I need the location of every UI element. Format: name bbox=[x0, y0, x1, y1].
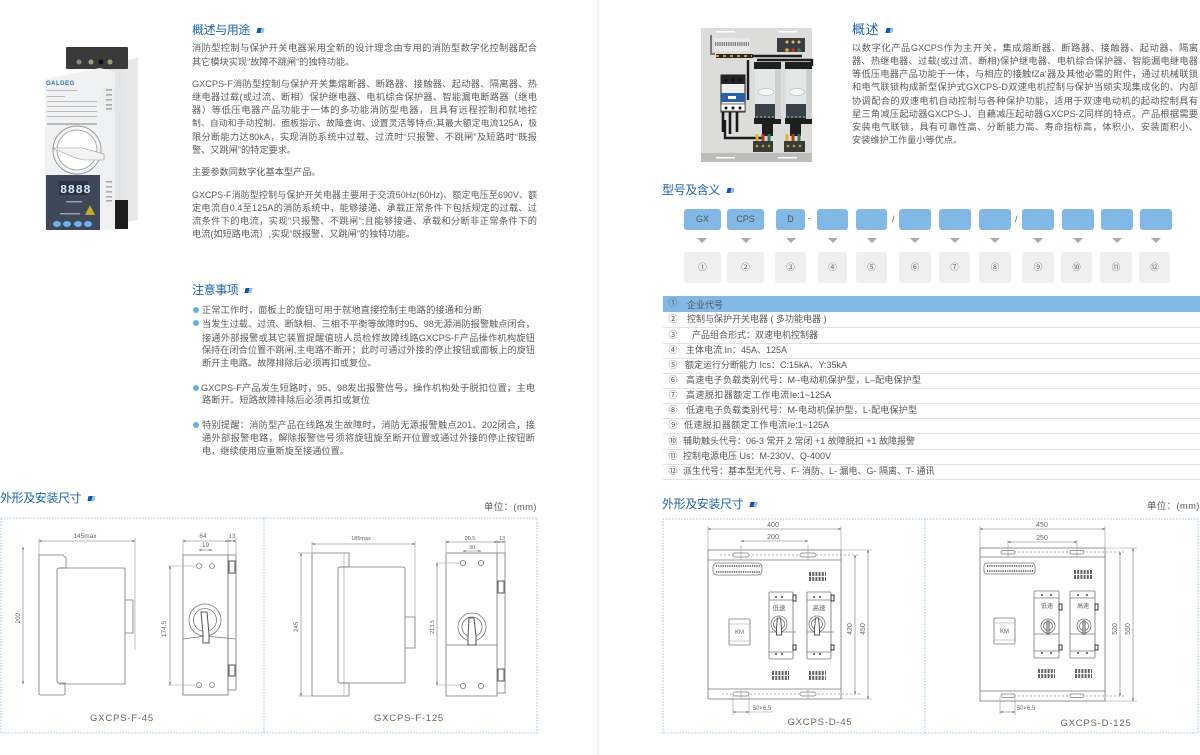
model code diagram: / bbox=[892, 214, 895, 224]
table: code meaning: ② bbox=[668, 314, 678, 324]
text block: overview: 器）等低压电器产品功能于一体的多功能消防型电器，且具有远程控制和就地控 bbox=[192, 105, 537, 115]
text block: precautions: 保持在闭合位置不跳闸,主电路不断开；此时可通过外接的停止按钮或面板上的旋钮 bbox=[202, 345, 535, 355]
front view: 30 bbox=[469, 545, 475, 551]
terminal blocks bbox=[772, 574, 826, 678]
model code diagram: ⑩ bbox=[1072, 262, 1081, 272]
text block: overview: GXCPS-F消防型控制与保护开关集熔断器、断路器、接触器、起动器、隔离器、热 bbox=[192, 79, 537, 89]
text block: precautions: 通外部报警电路，解除报警信号须将旋钮旋至断开位置或通过外接的停止按钮断 bbox=[202, 433, 535, 443]
dimensions: 200 bbox=[767, 534, 779, 541]
model label: GXCPS-F-45 bbox=[90, 713, 154, 724]
model code diagram: ⑫ bbox=[1150, 262, 1159, 272]
code boxes bbox=[684, 209, 721, 230]
side view bbox=[294, 536, 415, 696]
table: code meaning: ⑥ bbox=[668, 375, 678, 385]
model code diagram: / bbox=[1015, 214, 1018, 224]
low speed breaker bbox=[769, 592, 796, 659]
table: code meaning: ① bbox=[668, 298, 678, 308]
low speed breaker: 低速 bbox=[1041, 602, 1053, 610]
front view: 13 bbox=[228, 533, 236, 540]
text block: overview: 制、自动和手动控制、面板指示、故障查询、设置灵活等特点;其最大额定电流125A，极 bbox=[192, 118, 537, 128]
front view: 64 bbox=[199, 533, 207, 540]
photo: GXCPS-D panel bbox=[701, 28, 812, 162]
dimensions: 400 bbox=[767, 522, 779, 529]
table: code meaning: 产品组合形式：双速电机控制器 bbox=[692, 330, 818, 340]
text block: overview right: 安装维护工作量小等优点。 bbox=[852, 135, 962, 145]
dimensions: 50×6.5 bbox=[1017, 706, 1036, 712]
text block: precautions: 正常工作时，面板上的旋钮可用于就地直接控制主电路的接通和分断 bbox=[202, 305, 482, 315]
table: code meaning: 派生代号：基本型无代号、F- 消防、L- 漏电、G- 隔离、T- 通讯 bbox=[683, 466, 934, 476]
high speed breaker: 高速 bbox=[812, 603, 826, 612]
model code diagram: ① bbox=[698, 262, 707, 272]
heading: overview right bbox=[852, 22, 894, 37]
text block: overview: 警、又跳闸”的特定要求。 bbox=[192, 145, 296, 155]
heading: model meaning: 型号及含义 bbox=[662, 183, 720, 197]
text block: overview: 消防型控制与保护开关电器采用全新的设计理念由专用的消防型数字化控制器配合 bbox=[192, 43, 537, 53]
side view: 185max bbox=[351, 536, 371, 542]
table: code meaning: 辅助触头代号：06-3 常开 2 常闭 +1 故障脱扣 +1 故障报警 bbox=[683, 436, 915, 446]
table: code meaning: 控制电源电压 Us：M-230V、Q-400V bbox=[683, 451, 831, 461]
text block: overview: 主要参数同数字化基本型产品。 bbox=[192, 167, 321, 177]
dimensions: 250 bbox=[1036, 535, 1048, 542]
table: code meaning: ⑨ bbox=[668, 420, 678, 430]
unit label left: 单位：(mm) bbox=[484, 502, 537, 513]
model code diagram: - bbox=[808, 213, 811, 223]
model code diagram: ⑤ bbox=[867, 262, 876, 272]
model code diagram: CPS bbox=[736, 214, 755, 224]
terminal blocks bbox=[1038, 572, 1092, 676]
photo: GXCPS-F product: GALDEG bbox=[46, 81, 75, 87]
dimensions bbox=[708, 522, 872, 715]
bullet bbox=[193, 320, 199, 326]
text block: overview: 电流(如短路电流）,实现“既报警、又跳闸”的独特功能。 bbox=[192, 229, 415, 239]
text block: overview right: 器、热继电器、过载(或过流、断相)保护继电器、电机综合保护器、智能漏电继电器 bbox=[852, 56, 1198, 66]
dimensions: 450 bbox=[1036, 522, 1048, 529]
dimensions: 520 bbox=[1112, 623, 1119, 635]
text block: overview: 流条件下的电流，实现“只报警、不跳闸”;且能够接通、承载和分断非正常条件下的 bbox=[192, 216, 537, 226]
front view: 213.5 bbox=[430, 620, 436, 634]
table: code meaning bbox=[663, 296, 1200, 480]
table: code meaning: 高速电子负载类别代号：M–电动机保护型，L–配电保护型 bbox=[686, 375, 921, 385]
cable rail bbox=[984, 563, 1035, 574]
text block: overview bbox=[192, 43, 537, 239]
drawing: GXCPS-D-125 bbox=[980, 522, 1137, 729]
table: code meaning: ④ bbox=[668, 345, 678, 355]
text block: overview right bbox=[852, 43, 1198, 145]
KM contactor: KM bbox=[1000, 629, 1009, 635]
heading: outline and mounting dimensions left: 外形及安装尺寸 bbox=[0, 491, 81, 505]
bullet bbox=[193, 307, 199, 313]
high speed breaker bbox=[1070, 591, 1098, 658]
KM contactor bbox=[729, 619, 750, 645]
table: code meaning: ⑤ bbox=[668, 360, 678, 370]
model code diagram: ⑧ bbox=[991, 262, 999, 272]
text block: precautions bbox=[193, 305, 535, 456]
model code diagram: ⑦ bbox=[950, 262, 959, 272]
mounting plate bbox=[708, 545, 860, 699]
table: code meaning: ③ bbox=[668, 330, 678, 340]
heading: overview and use: 概述与用途 bbox=[192, 23, 250, 37]
model code diagram bbox=[684, 209, 1172, 283]
text block: overview: GXCPS-F消防型控制与保护开关电器主要用于交流50Hz(60Hz)、额定电压至690V、额 bbox=[192, 190, 537, 200]
model code diagram: ⑥ bbox=[911, 262, 919, 272]
text block: overview right: 和电气联锁构成新型保护式GXCPS-D双速电机控制与保护当频实现集成化的、内部 bbox=[852, 82, 1198, 92]
bullet bbox=[193, 422, 199, 428]
table: code meaning: 低速电子负载类别代号：M-电动机保护型，L-配电保护型 bbox=[686, 405, 917, 415]
side view: 245 bbox=[294, 621, 300, 632]
model label: GXCPS-D-125 bbox=[1060, 718, 1132, 729]
table: code meaning: 低速脱扣器额定工作电流Ie:1~125A bbox=[684, 420, 829, 430]
high speed breaker bbox=[807, 592, 834, 659]
text block: overview: 限分断能力达80kA，实现消防系统中过载、过流时“只报警、不跳闸”及短路时“既报 bbox=[192, 132, 537, 142]
table: code meaning: 控制与保护开关电器 ( 多功能电器 ) bbox=[687, 314, 826, 324]
side view: 202 bbox=[15, 612, 22, 623]
table: code meaning: 主体电流 In：45A、125A bbox=[686, 345, 787, 355]
table: code meaning: ⑧ bbox=[668, 405, 678, 415]
code boxes: GX bbox=[696, 214, 709, 224]
table: code meaning: ⑫ bbox=[668, 466, 678, 476]
model code diagram: ② bbox=[741, 262, 750, 272]
table: code meaning: ⑦ bbox=[668, 390, 678, 400]
drawing: GXCPS-D-45 bbox=[663, 519, 1198, 733]
front view bbox=[161, 533, 236, 695]
text block: overview: 其它模块实现“故障不跳闸”的独特功能。 bbox=[192, 57, 354, 67]
front view: 90.5 bbox=[465, 536, 475, 542]
cable rail bbox=[713, 563, 762, 575]
text block: overview right: 星三角减压起动器GXCPS-J、自藕减压起动器GXCPS-Z同样的特点。产品根据需要 bbox=[852, 109, 1198, 119]
unit label right: 单位：(mm) bbox=[1147, 501, 1200, 512]
KM contactor: KM bbox=[735, 630, 744, 636]
table: code meaning: ⑩ bbox=[668, 436, 678, 446]
heading: overview right: 概述 bbox=[852, 22, 879, 37]
heading: outline and mounting dimensions right: 外形及安装尺寸 bbox=[662, 497, 743, 511]
low speed breaker bbox=[1034, 591, 1062, 658]
drawing: GXCPS-F-45 bbox=[1, 518, 537, 733]
model code diagram: ⑨ bbox=[1034, 262, 1042, 272]
text block: overview right: 以数字化产品GXCPS作为主开关，集成熔断器、断路器、接触器、起动器、隔离 bbox=[852, 43, 1198, 53]
text block: overview: 定电流自0.4至125A的消防系统中，能够接通、承载正常条件下包括规定的过载、过 bbox=[192, 203, 537, 213]
text block: overview right: 协调配合的双速电机自动控制与各种保护功能，适用于双速电动机的起动控制具有 bbox=[852, 96, 1198, 106]
photo: GXCPS-F product: 8888 bbox=[60, 183, 91, 197]
table: code meaning: 企业代号 bbox=[687, 300, 723, 310]
dimensions: 550 bbox=[1125, 623, 1132, 635]
text block: precautions: GXCPS-F产品发生短路时，95、98发出报警信号，操作机构处于脱扣位置，主电 bbox=[201, 383, 535, 393]
front view: 19 bbox=[202, 542, 209, 549]
text block: overview right: 安装电气联锁，具有可靠性高、分断能力高、寿命指标高，体积小、安装面积小、 bbox=[852, 122, 1198, 132]
table: code meaning: 额定运行分断能力 Ics：C:15kA、Y:35kA bbox=[685, 360, 847, 370]
photo: GXCPS-F product bbox=[45, 47, 138, 230]
text block: precautions: 接通外部报警或其它装置提醒值班人员检修故障线路GXCPS-F产品操作机构旋钮 bbox=[202, 333, 535, 343]
text block: overview right: 等低压电器产品功能于一体，与相应的接触fZa‘器及其他必需的附件，通过机械联锁 bbox=[852, 69, 1198, 79]
front view bbox=[430, 536, 505, 696]
model label: GXCPS-D-45 bbox=[787, 717, 853, 728]
drawing: GXCPS-F-125 bbox=[294, 536, 505, 724]
heading: precautions: 注意事项 bbox=[192, 283, 238, 297]
text block: precautions: 路断开。短路故障排除后必须再扣或复位 bbox=[202, 395, 370, 405]
mounting plate bbox=[980, 540, 1125, 701]
side view: 145max bbox=[73, 533, 97, 540]
text block: precautions: 断开主电路。故障排除后必须再扣或复位。 bbox=[202, 358, 377, 368]
text block: overview: 继电器过载(或过流、断相）保护继电器、电机综合保护器、智能漏电断路器（继电 bbox=[192, 92, 537, 102]
text block: precautions: 特别提醒：消防型产品在线路发生故障时，消防无源报警触点201、202闭合，接 bbox=[202, 420, 535, 430]
low speed breaker: 低速 bbox=[772, 603, 786, 612]
model label: GXCPS-F-125 bbox=[374, 713, 444, 724]
table: code meaning: 高速脱扣器额定工作电流Ie:1~125A bbox=[686, 390, 831, 400]
text block: precautions: 电，继续使用应重新旋至接通位置。 bbox=[202, 446, 349, 456]
KM contactor bbox=[994, 618, 1015, 644]
front view: 174.5 bbox=[161, 620, 168, 637]
text block: precautions: 当发生过载、过流、断缺相、三相不平衡等故障时95、98无源消防报警触点闭合， bbox=[202, 319, 535, 329]
model code diagram: ④ bbox=[828, 262, 837, 272]
high speed breaker: 高速 bbox=[1077, 602, 1089, 610]
dimensions: 50×6.5 bbox=[753, 706, 772, 712]
model code diagram: D bbox=[787, 214, 794, 224]
bullet bbox=[193, 385, 199, 391]
table: code meaning: ⑪ bbox=[668, 451, 678, 461]
model code diagram: ⑪ bbox=[1112, 262, 1120, 272]
dimensions: 450 bbox=[860, 623, 867, 635]
front view: 13 bbox=[499, 536, 505, 542]
side view bbox=[15, 533, 135, 695]
dimensions bbox=[980, 522, 1137, 715]
model code diagram: ③ bbox=[786, 262, 795, 272]
dimensions: 420 bbox=[847, 623, 854, 635]
